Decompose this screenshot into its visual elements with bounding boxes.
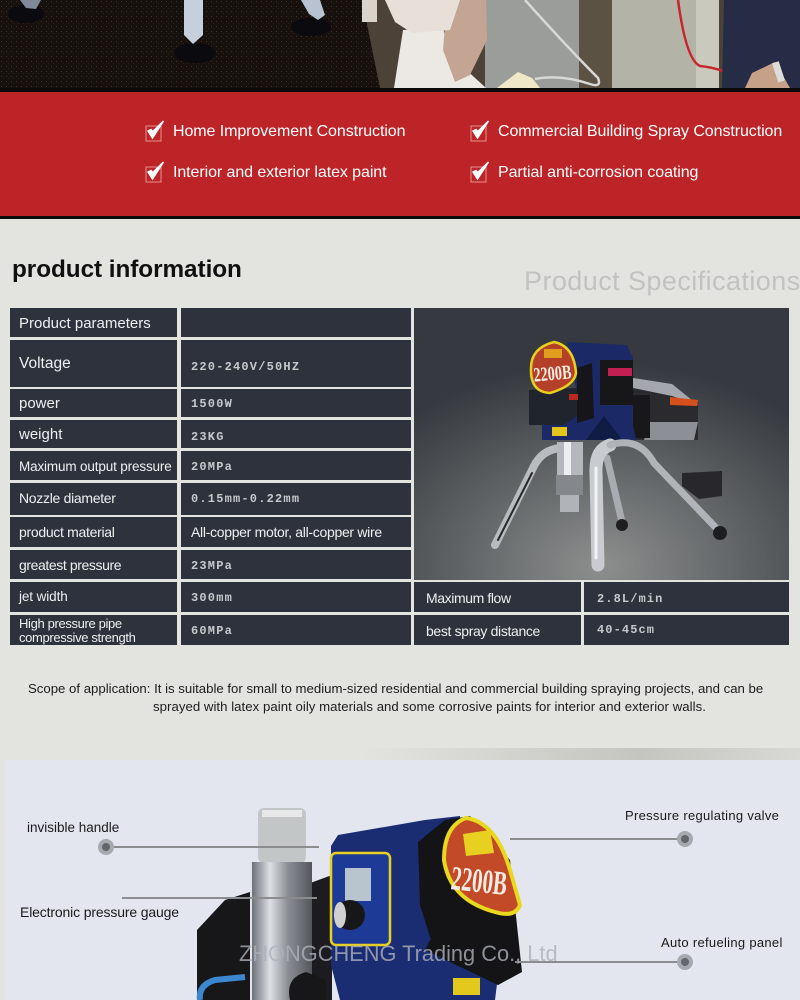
parameter table: 23MPa [191,559,233,573]
callout: invisible handle line [103,846,319,848]
parameter table: Product parameters [19,315,151,332]
motor [632,378,698,440]
callout dot: auto refueling panel [677,954,693,970]
parameter table: 23KG [191,430,225,444]
scope of application text: sprayed with latex paint oily materials and some corrosive paints for interior and exterior walls. [153,699,706,714]
callout: refuel line [515,961,680,963]
person spraying [362,0,800,88]
2200B badge: 2200B [533,361,572,387]
extra specs row: maximum flow: 2.8L/min [597,592,663,606]
heading: product information: product information [12,256,242,283]
parameter table: 0.15mm-0.22mm [191,492,300,506]
red banner [0,89,800,219]
label: Pressure regulating valve: Pressure regulating valve [625,808,779,823]
scope of application text: Scope of application: It is suitable for small to medium-sized residential and commercial building spraying projects, and can be [28,681,763,696]
parameter table: compressive strength [19,630,136,645]
extra specs row: best spray distance [414,615,789,645]
parameter table: weight [19,426,62,443]
feature: Interior and exterior latex paint: Interior and exterior latex paint [173,164,386,181]
parameter table: Maximum output pressure [19,459,172,474]
label: Auto refueling panel: Auto refueling panel [661,935,783,950]
extra specs row: best spray distance: 40-45cm [597,623,655,637]
callout dot: invisible handle [98,839,114,855]
top photo strip [0,0,800,89]
feature: Home Improvement Construction: Home Improvement Construction [173,123,405,140]
parameter table: 220-240V/50HZ [191,360,300,374]
callout: gauge line [122,897,317,899]
scope of application text [28,681,763,714]
parameter table [10,308,411,645]
watermark heading: Product Specifications: Product Specifications [524,266,800,296]
parameter table: greatest pressure [19,557,121,573]
product photo: 2200B sprayer [414,308,789,580]
parameter table: 300mm [191,591,233,605]
parameter table: Voltage [19,355,71,372]
feature: Commercial Building Spray Construction: Commercial Building Spray Construction [498,123,782,140]
frame [529,342,636,440]
callout dot: pressure regulating valve [677,831,693,847]
feature: Partial anti-corrosion coating: Partial anti-corrosion coating [498,164,698,181]
parameter table: jet width [19,589,68,604]
extra specs row: maximum flow [414,582,789,612]
parameter table: High pressure pipe [19,616,122,631]
parameter table: product material [19,524,115,540]
machine closeup: 2200B [449,860,509,903]
extra specs row: maximum flow: Maximum flow [426,590,511,606]
watermark: ZHONGCHENG Trading Co., Ltd: ZHONGCHENG Trading Co., Ltd [239,941,558,966]
extra specs row: best spray distance: best spray distance [426,623,540,639]
stand legs and pump [495,443,718,565]
label: Electronic pressure gauge: Electronic pressure gauge [20,904,179,920]
parameter table: 20MPa [191,460,233,474]
callout: valve line [510,838,680,840]
parameter table: power [19,395,60,412]
parameter table: 1500W [191,397,233,411]
parameter table: 60MPa [191,624,233,638]
dark carpet with spray legs [0,0,380,88]
parameter table: All-copper motor, all-copper wire [191,524,382,540]
2200B badge [531,342,576,393]
parameter table: Nozzle diameter [19,490,116,506]
detail photo: labelled machine [0,748,800,760]
label: invisible handle: invisible handle [27,820,119,835]
